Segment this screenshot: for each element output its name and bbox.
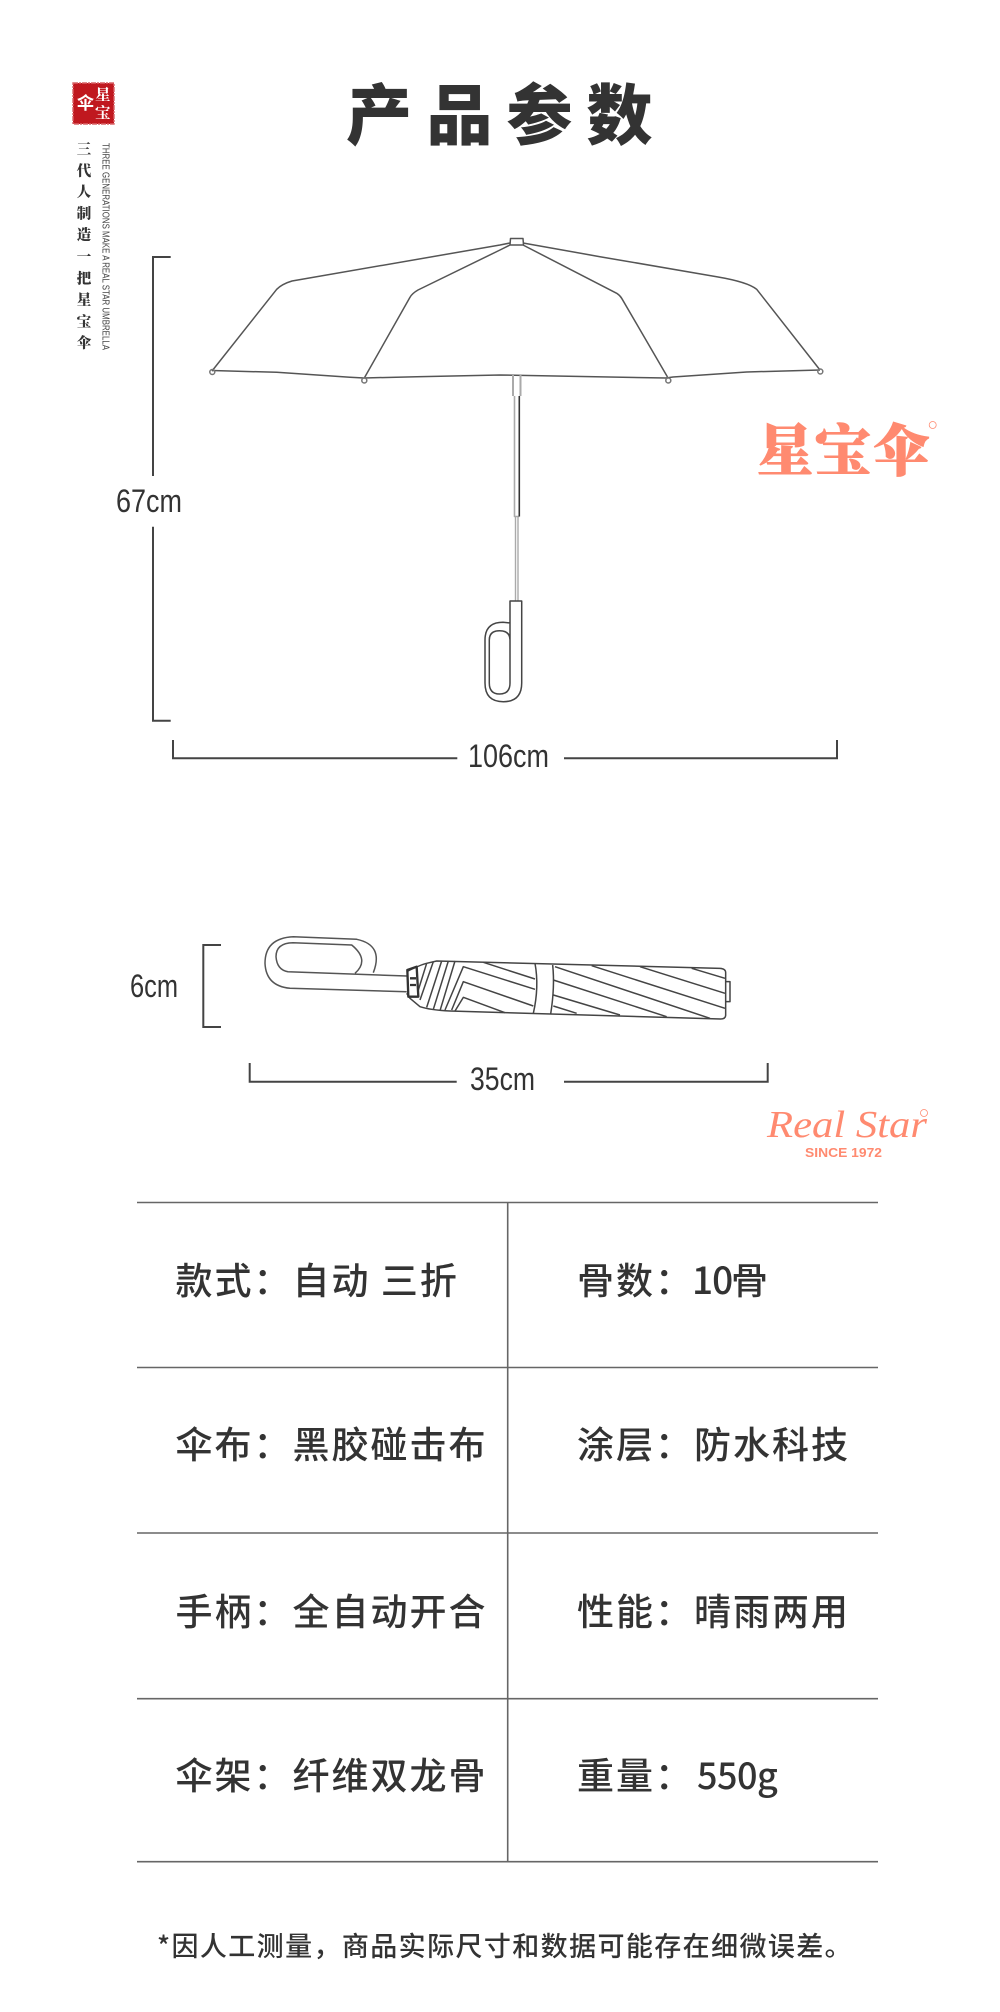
dimension: thickness 6cm (130, 945, 221, 1027)
dimension: height 67cm: 67cm (116, 483, 182, 519)
title: 产品参数 (346, 63, 652, 159)
slogan chinese vertical: 三代人制造一把星宝伞 (77, 138, 92, 353)
footnote: *因人工测量，商品实际尺寸和数据可能存在细微误差。 (157, 1925, 853, 1964)
icon: red seal (73, 83, 114, 124)
slogan english vertical: THREE GENERATIONS MAKE A REAL STAR UMBRELLA (100, 143, 112, 350)
folded handle (265, 937, 407, 992)
icon: red seal: 伞 (77, 89, 94, 114)
icon: red seal: 星 (95, 83, 111, 105)
dimension: length 35cm: 35cm (470, 1061, 535, 1097)
spec: rib count: 骨 (731, 1251, 770, 1305)
icon: red seal: 宝 (95, 101, 111, 123)
dimension: width 106cm: 106cm (468, 738, 549, 774)
spec: coating: 涂层：防水科技 (577, 1415, 850, 1469)
spec: frame: 伞架：纤维双龙骨 (176, 1746, 488, 1800)
umbrella shaft (513, 375, 520, 601)
brand logo english: Real Star (766, 1104, 927, 1146)
dimension: width 106cm (173, 738, 837, 774)
brand logo chinese: 星宝伞 (757, 408, 929, 488)
specification table (137, 1202, 878, 1862)
open umbrella drawing (210, 238, 823, 702)
brand logo english (766, 1104, 928, 1160)
spec: rib count: 骨数： (577, 1251, 694, 1305)
spec: rib count: 10 (692, 1251, 732, 1305)
dimension: length 35cm (250, 1061, 768, 1097)
umbrella handle (485, 601, 522, 702)
dimension: thickness 6cm: 6cm (130, 968, 178, 1004)
spec: style: 款式：自动 三折 (176, 1251, 459, 1305)
umbrella canopy (210, 238, 823, 383)
spec: weight: 重量： (577, 1746, 694, 1800)
spec: weight: 550g (697, 1748, 778, 1800)
brand logo english: SINCE 1972 (805, 1145, 882, 1160)
brand seal and slogan (73, 83, 114, 353)
folded body (407, 961, 730, 1019)
dimension: height 67cm (116, 257, 182, 721)
spec: fabric: 伞布：黑胶碰击布 (176, 1415, 488, 1469)
spec: performance: 性能：晴雨两用 (577, 1582, 850, 1636)
folded umbrella drawing (265, 937, 730, 1019)
spec: handle: 手柄：全自动开合 (176, 1582, 488, 1636)
